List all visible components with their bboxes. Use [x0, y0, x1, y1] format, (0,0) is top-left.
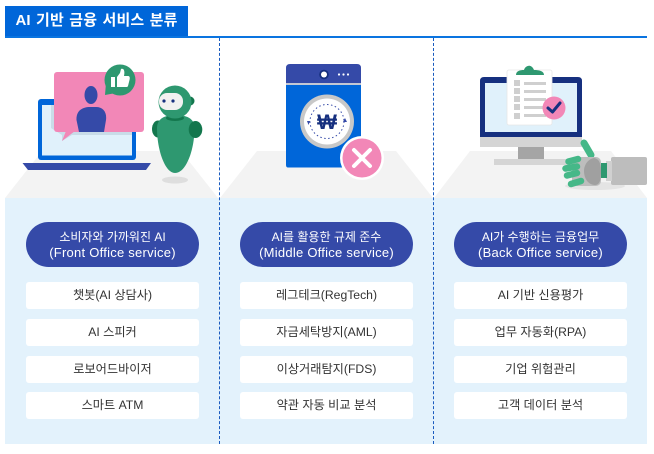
- list item: [454, 282, 627, 309]
- list item: 약관 자동 비교 분석: [277, 398, 376, 412]
- list item: [240, 356, 413, 383]
- list item: AI 스피커: [88, 325, 137, 339]
- heading: front office: (Front Office service): [49, 245, 176, 260]
- icon: prohibited X badge: [340, 136, 384, 180]
- list item: [454, 392, 627, 419]
- panel: front office: [26, 222, 199, 419]
- heading: back office: [454, 222, 627, 267]
- list item: [26, 392, 199, 419]
- list item: AI 기반 신용평가: [498, 288, 583, 302]
- panel: middle office: [240, 222, 413, 419]
- list item: 챗봇(AI 상담사): [73, 288, 152, 302]
- icon: green robot: [152, 86, 202, 184]
- list item: [454, 356, 627, 383]
- list item: 고객 데이터 분석: [498, 398, 583, 412]
- icon: desktop monitor: [480, 77, 582, 165]
- icon: clipboard checklist: [507, 66, 552, 125]
- list item: [240, 319, 413, 346]
- list item: 레그테크(RegTech): [276, 288, 377, 302]
- list item: [26, 319, 199, 346]
- floor: left: [5, 151, 218, 198]
- heading: middle office: AI를 활용한 규제 준수: [272, 230, 381, 244]
- icon: pink check badge: [542, 96, 566, 120]
- panel: back office: [454, 222, 627, 419]
- icon: thumbs up badge: [104, 64, 136, 96]
- list item: 기업 위험관리: [505, 362, 576, 376]
- heading: middle office: (Middle Office service): [259, 245, 394, 260]
- heading: front office: 소비자와 가까워진 AI: [59, 230, 166, 244]
- list item: [454, 319, 627, 346]
- list item: [26, 282, 199, 309]
- icon: chat bubble with person: [54, 72, 144, 141]
- icon: laptop: [22, 99, 151, 170]
- title: AI 기반 금융 서비스 분류: [15, 12, 178, 29]
- heading: middle office: [240, 222, 413, 267]
- icon: money laundering washing machine: ₩: [317, 111, 337, 134]
- heading: back office: AI가 수행하는 금융업무: [482, 230, 599, 244]
- icon: money laundering washing machine: [286, 64, 361, 168]
- list item: 업무 자동화(RPA): [495, 325, 586, 339]
- title: [5, 6, 188, 37]
- list item: 자금세탁방지(AML): [276, 325, 377, 339]
- list item: 스마트 ATM: [82, 398, 143, 412]
- heading: front office: [26, 222, 199, 267]
- icon: robot hand thumbs up: [565, 143, 647, 190]
- heading: back office: (Back Office service): [478, 245, 603, 260]
- list item: 이상거래탐지(FDS): [277, 362, 376, 376]
- floor: middle: [220, 151, 433, 198]
- list item: [26, 356, 199, 383]
- list item: [240, 392, 413, 419]
- panel background: light blue band: [5, 198, 647, 444]
- floor: right: [434, 151, 647, 198]
- list item: 로보어드바이저: [73, 362, 152, 376]
- list item: [240, 282, 413, 309]
